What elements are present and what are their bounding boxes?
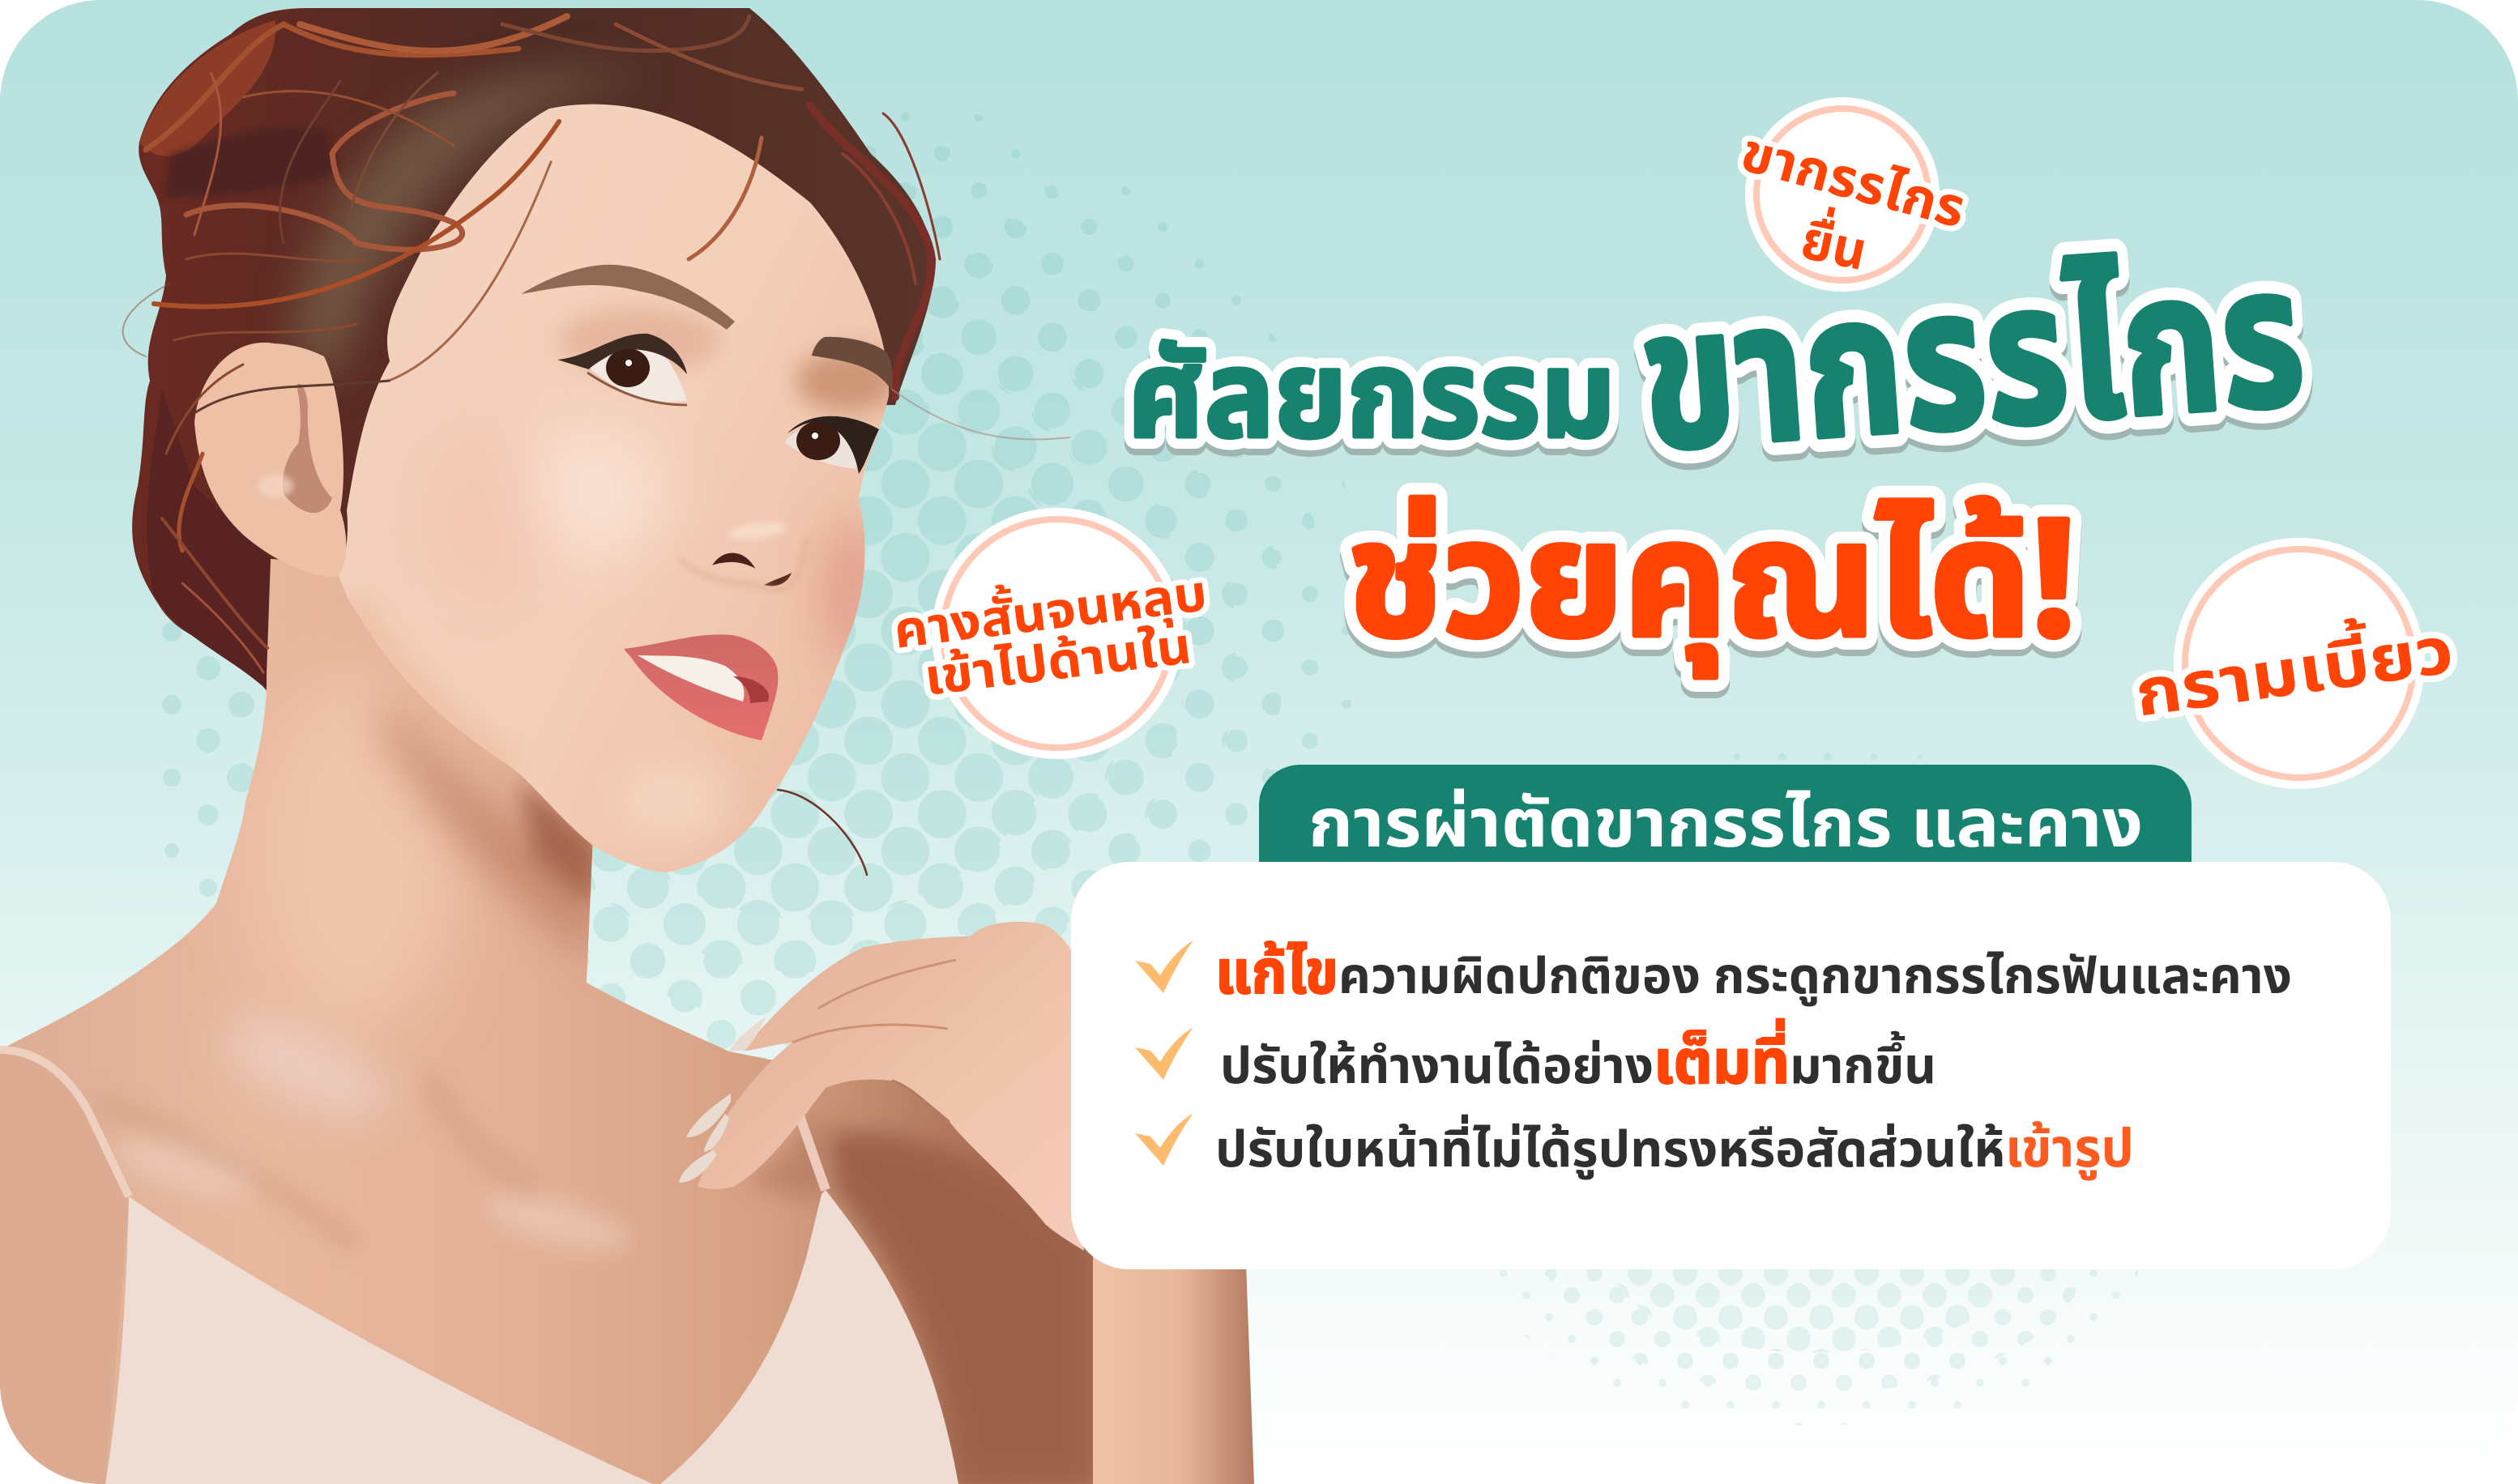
row 2: มากขึ้น: [1790, 1030, 1936, 1106]
lips and teeth: [624, 634, 778, 740]
row 1: ความผิดปกติของ กระดูกขากรรไกรฟันและคาง: [1338, 940, 2292, 1016]
halftone dots below card: [1500, 1269, 2139, 1426]
left dress strap: [0, 1050, 129, 1196]
body and arm skin: [0, 559, 1093, 1484]
right eye: [784, 424, 856, 468]
bubble: receded chin: เข้าไปด้านใน: [920, 609, 1196, 718]
hair strands: [123, 16, 1069, 875]
soft neck and chest shading: [97, 672, 1094, 1484]
bubble: protruding jaw: ขากรรไกร: [1731, 113, 1974, 251]
left arm: [0, 1050, 130, 1484]
heading line 1: ขากรรไกร: [1632, 203, 2314, 543]
check icon 2: [1135, 1027, 1193, 1080]
heading line 1: ศัลยกรรม: [1128, 308, 1615, 492]
row 2: [1135, 1018, 1936, 1111]
fingernails: [679, 1017, 766, 1183]
heading line 1: ศัลยกรรม: [1128, 308, 1615, 492]
halftone dots above card: [1734, 753, 1923, 761]
bubble: protruding jaw: ยื่น: [1794, 202, 1874, 294]
plum hair shadow: [166, 127, 340, 198]
hair back mass: [132, 8, 934, 697]
heading line 1: ขากรรไกร: [1632, 197, 2314, 536]
check icon 3: [1135, 1113, 1193, 1166]
halftone dots left of portrait: [162, 622, 256, 897]
row 1: แก้ไข: [1215, 928, 1338, 1021]
left eye: [589, 348, 687, 402]
bubble: crooked jaw: กรามเบี้ยว: [2129, 603, 2460, 745]
nose: [681, 518, 807, 591]
dark low hair: [147, 390, 264, 687]
eyebrows: [521, 265, 893, 390]
eyes: [557, 334, 879, 474]
dress: [105, 1190, 958, 1484]
white card: [1071, 862, 2391, 1269]
portrait of woman: [0, 8, 1254, 1484]
check icon 1: [1135, 940, 1193, 993]
teal tab: การผ่าตัดขากรรไกร และคาง: [1308, 774, 2143, 877]
ear: [194, 343, 346, 577]
hand: [679, 922, 1084, 1251]
row 2: ปรับให้ทำงานได้อย่าง: [1220, 1030, 1654, 1106]
heading line 2: ช่วยคุณได้!: [1347, 463, 2076, 708]
forearm: [1093, 1215, 1254, 1484]
row 3: เข้ารูป: [2005, 1110, 2134, 1191]
bubble: protruding jaw: [1731, 97, 1974, 294]
row 1: [1135, 928, 2292, 1021]
heading line 2: ช่วยคุณได้!: [1347, 463, 2076, 708]
heading line 1: ขากรรไกร: [1632, 197, 2314, 536]
right dress strap: [799, 1114, 826, 1190]
olive scalp tone along hairline: [292, 70, 648, 381]
halftone dots behind portrait: [587, 112, 1351, 1059]
row 3: ปรับใบหน้าที่ไม่ได้รูปทรงหรือสัดส่วนให้: [1215, 1113, 2005, 1189]
heading line 1: [1128, 197, 2314, 543]
heading line 2: ช่วยคุณได้!: [1347, 470, 2076, 714]
heading line 1: ศัลยกรรม: [1128, 314, 1615, 498]
copper bun: [139, 20, 275, 156]
bubble: receded chin: คางสั้นจนหลุบ: [890, 556, 1212, 671]
bubble: crooked jaw: [2129, 538, 2460, 789]
face and head: [339, 104, 897, 872]
row 2: เต็มที่: [1654, 1018, 1790, 1111]
bubble: receded chin: [890, 508, 1212, 759]
